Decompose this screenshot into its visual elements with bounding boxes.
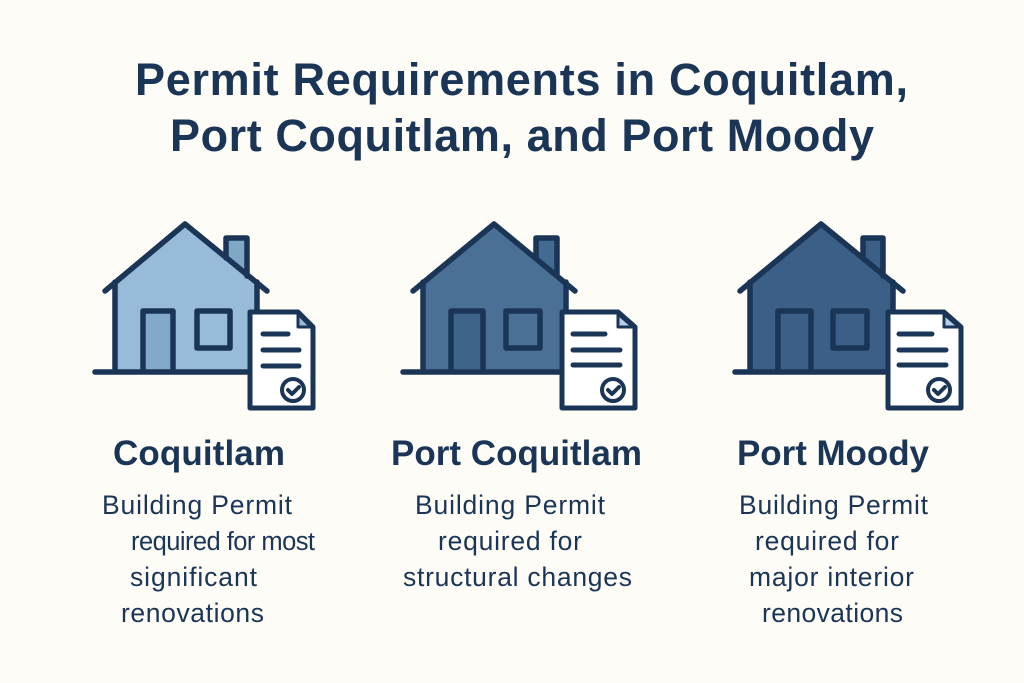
text: Coquitlam permit description	[102, 490, 315, 628]
text: Port Moody permit description: major interior	[749, 562, 914, 592]
panel: Port Coquitlam	[391, 224, 642, 592]
title: Permit Requirements in Coquitlam,	[135, 54, 908, 105]
text: Port Moody permit description	[739, 490, 929, 628]
heading: Port Moody: Port Moody	[737, 434, 930, 473]
text: Port Moody permit description: Building Permit	[739, 490, 929, 520]
panel: Port Moody	[735, 224, 961, 628]
panel: Coquitlam	[95, 224, 315, 628]
text: Coquitlam permit description: significant	[130, 562, 258, 592]
text: Coquitlam permit description: required for most	[131, 528, 315, 556]
text: Coquitlam permit description: Building Permit	[102, 490, 293, 520]
text: Port Coquitlam permit description: required for	[438, 526, 582, 556]
icon: dark blue house with permit document	[735, 224, 961, 408]
text: Port Moody permit description: required for	[755, 526, 899, 556]
title: Port Coquitlam, and Port Moody	[170, 110, 874, 161]
title	[135, 54, 908, 161]
icon: light blue house with permit document	[95, 224, 313, 408]
text: Coquitlam permit description: renovations	[121, 598, 264, 628]
text: Port Moody permit description: renovations	[762, 598, 903, 628]
icon: medium blue house with permit document	[403, 224, 635, 408]
heading: Coquitlam: Coquitlam	[113, 434, 285, 473]
text: Port Coquitlam permit description: structural changes	[403, 562, 632, 592]
text: Port Coquitlam permit description: Building Permit	[415, 490, 606, 520]
text: Port Coquitlam permit description	[403, 490, 632, 592]
heading: Port Coquitlam: Port Coquitlam	[391, 434, 642, 473]
